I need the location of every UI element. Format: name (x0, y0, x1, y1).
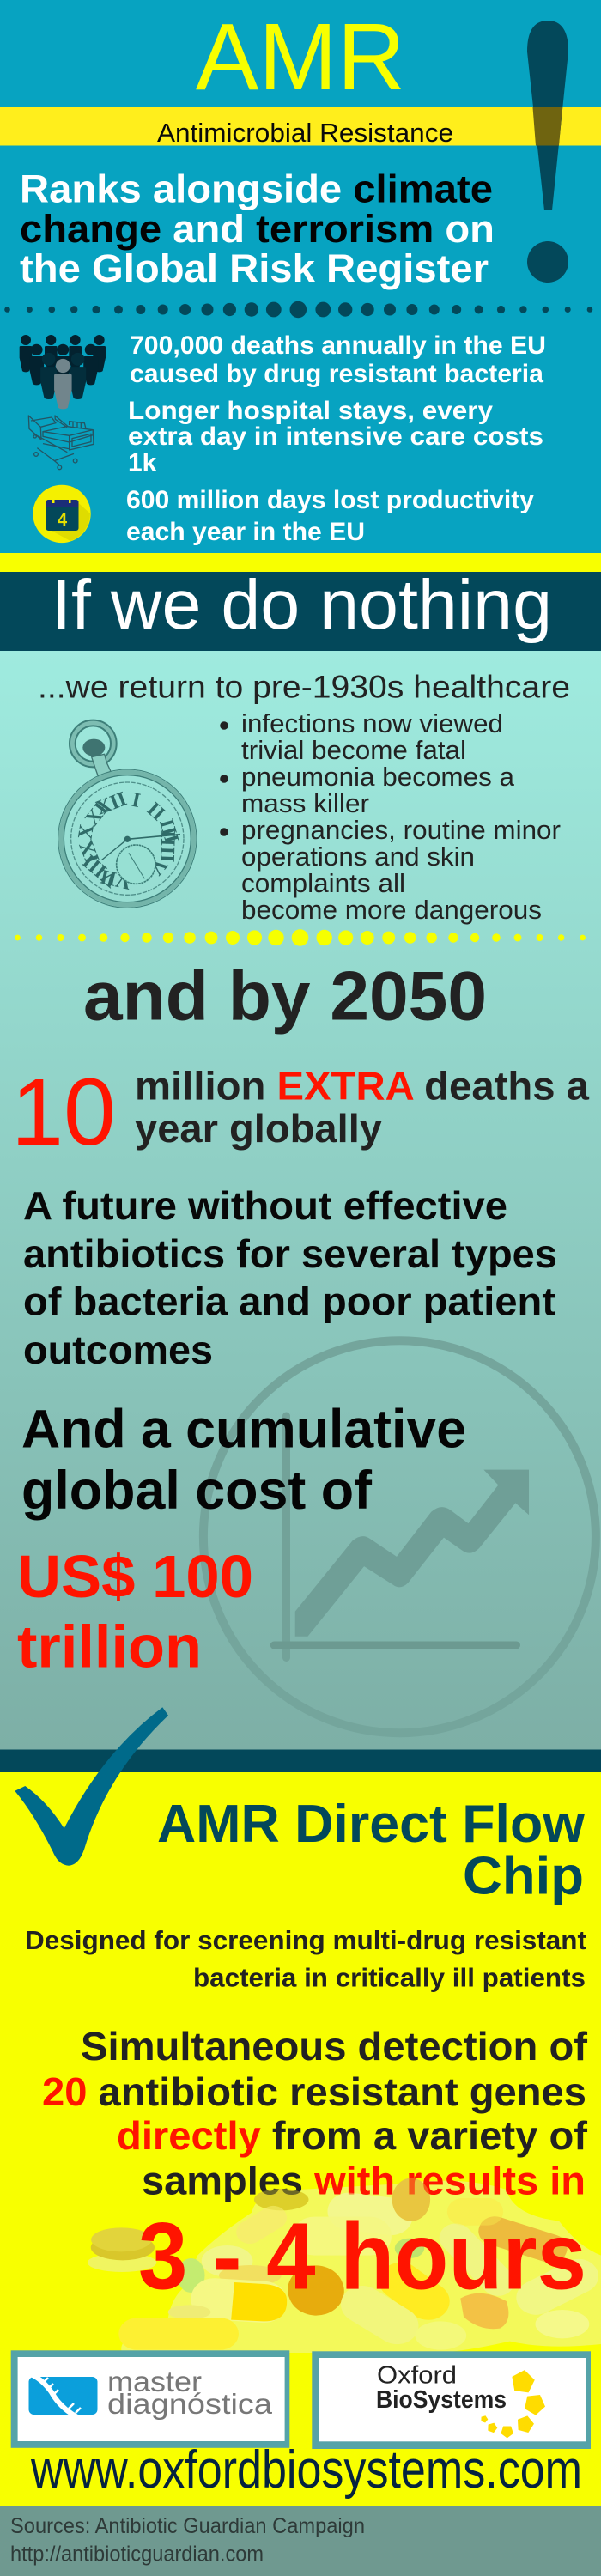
bullet list: consequences: pneumonia becomes a (241, 762, 515, 792)
footer: sources: http://antibioticguardian.com (10, 2542, 264, 2566)
text: longer hospital stays (128, 397, 543, 477)
text: future without antibiotics: antibiotics for several types (23, 1231, 557, 1276)
text: simultaneous detection (42, 2024, 588, 2203)
text: 700,000 deaths (130, 331, 546, 388)
text: designed for screening (25, 1925, 586, 1992)
bullet list: consequences: pregnancies, routine minor (241, 815, 561, 845)
text: future without antibiotics: of bacteria and poor patient (23, 1279, 555, 1324)
statement: global risk register (20, 167, 495, 290)
heading: AMR Direct Flow Chip: Chip (463, 1846, 584, 1906)
icon: yellow pentagons (480, 2368, 549, 2438)
text: designed for screening: bacteria in critically ill patients (193, 1963, 586, 1992)
text: 600 million days (126, 486, 534, 546)
heading: and by 2050: and by 2050 (83, 958, 487, 1036)
text: cumulative global cost: global cost of (21, 1461, 373, 1521)
text: designed for screening: Designed for screening multi-drug resistant (25, 1925, 586, 1955)
icon: pocket watch: XII (93, 788, 130, 820)
icon: check mark (15, 1707, 168, 1866)
logo: master diagnostica (11, 2350, 289, 2448)
logo text: master (107, 2366, 202, 2397)
bullet list: consequences: infections now viewed (241, 708, 503, 738)
logo text: BioSystems (376, 2386, 507, 2414)
icon: calendar: 4 (58, 511, 68, 530)
icon: pocket watch: IIII (155, 829, 179, 863)
text: future without antibiotics (23, 1183, 557, 1372)
heading band (0, 572, 601, 651)
bullet list: consequences: trivial become fatal (241, 735, 466, 765)
panel: if we do nothing (0, 566, 601, 1750)
text: longer hospital stays: extra day in intensive care costs (128, 422, 543, 451)
icon: pocket watch (58, 723, 197, 908)
text: cumulative global cost (21, 1400, 466, 1521)
text: longer hospital stays: 1k (128, 448, 157, 477)
icon: pocket watch: VIII (78, 849, 123, 891)
heading: AMR Direct Flow Chip (157, 1795, 586, 1906)
statement: global risk register: the Global Risk Register (20, 246, 489, 290)
icon: pocket watch: III (155, 817, 183, 846)
heading: If we do nothing: If we do nothing (52, 566, 552, 644)
logo text: diagnóstica (107, 2388, 273, 2420)
panel: AMR header (0, 0, 601, 553)
text: longer hospital stays: Longer hospital stays, every (128, 397, 493, 425)
subtitle: Antimicrobial Resistance: Antimicrobial Resistance (157, 118, 453, 148)
subtitle band (0, 107, 601, 146)
subheading: pre-1930s healthcare: ...we return to pre-1930s healthcare (38, 670, 570, 704)
illustration: pills (88, 2178, 601, 2354)
stat: US$ 100 trillion: trillion (17, 1613, 202, 1680)
icon: DNA square (29, 2375, 98, 2417)
bullet list: consequences: complaints all (241, 868, 405, 898)
bullet list: consequences: operations and skin (241, 841, 475, 872)
text: 700,000 deaths: 700,000 deaths annually in the EU (130, 331, 546, 360)
icon: pocket watch: I (130, 789, 143, 812)
title: AMR: AMR (196, 4, 405, 110)
text: 700,000 deaths: caused by drug resistant bacteria (130, 360, 543, 388)
footer: sources: Sources: Antibiotic Guardian Campaign (10, 2514, 365, 2538)
icon: rising chart (203, 1340, 596, 1733)
heading: AMR Direct Flow Chip: AMR Direct Flow (157, 1795, 586, 1854)
divider band (0, 1750, 601, 1772)
icon: hospital bed (28, 416, 94, 470)
dotted divider: dark (4, 301, 592, 318)
text: future without antibiotics: outcomes (23, 1327, 213, 1372)
pills overlapping the text (254, 2178, 503, 2238)
panel: AMR Direct Flow Chip (0, 1707, 601, 2506)
statement: global risk register: Ranks alongside climate (20, 167, 493, 211)
text: simultaneous detection: 20 antibiotic resistant genes (42, 2069, 586, 2114)
text: future without antibiotics: A future without effective (23, 1183, 507, 1228)
text: simultaneous detection: samples with results in (142, 2159, 586, 2203)
icon: pocket watch: V (144, 854, 172, 879)
stat: 10: 10 (11, 1060, 116, 1165)
text: simultaneous detection: Simultaneous detection of (81, 2024, 588, 2069)
logo text (376, 2362, 507, 2414)
text: million extra deaths (135, 1063, 589, 1151)
yellow divider bar (0, 553, 601, 572)
logo text (107, 2366, 273, 2420)
logo text: Oxford (377, 2362, 457, 2390)
icon: crowd of people (20, 335, 106, 409)
icon: pocket watch: VII (98, 865, 133, 893)
bullet list: consequences: become more dangerous (241, 895, 542, 925)
icon: pocket watch: II (143, 799, 169, 825)
bullet list: consequences: mass killer (241, 788, 369, 818)
icon: calendar (33, 485, 91, 543)
icon: pocket watch: X (75, 823, 99, 841)
icon: pocket watch: XI (81, 799, 112, 830)
icon: pocket watch: IX (75, 836, 105, 866)
statement: global risk register: change and terrorism on (20, 207, 495, 251)
bullet list: consequences (220, 708, 561, 925)
icon: exclamation mark (527, 21, 568, 283)
text: cumulative global cost: And a cumulative (21, 1400, 466, 1460)
text: million extra deaths: year globally (135, 1106, 382, 1151)
logo: Oxford BioSystems (312, 2351, 591, 2449)
stat: US$ 100 trillion: US$ 100 (17, 1543, 253, 1610)
text: 600 million days: 600 million days lost productivity (126, 486, 534, 514)
stat: US$ 100 trillion (17, 1543, 253, 1680)
dotted divider: yellow (15, 929, 586, 946)
text: 600 million days: each year in the EU (126, 518, 365, 546)
text: simultaneous detection: directly from a variety of (117, 2113, 588, 2158)
text: million extra deaths: million EXTRA deaths a (135, 1063, 589, 1108)
footer: sources (0, 2506, 601, 2576)
